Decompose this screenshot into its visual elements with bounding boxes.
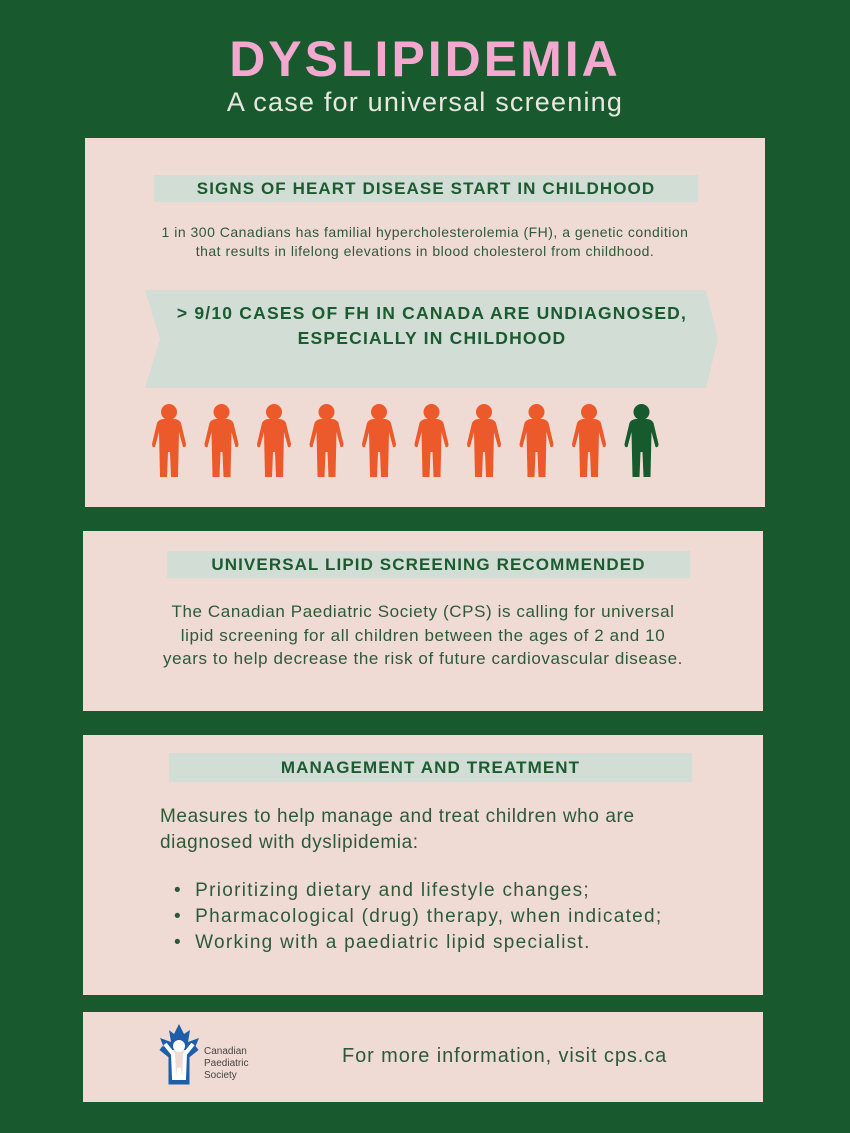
heading: management	[169, 753, 692, 782]
text: CPS recommendation	[163, 602, 683, 668]
text: FH stat: 1 in 300 Canadians has familial hypercholesterolemia (FH), a genetic condition	[162, 224, 688, 240]
heading: signs	[154, 175, 698, 202]
panel: footer	[83, 1012, 763, 1102]
panel: signs of heart disease	[85, 138, 765, 507]
text: more info: For more information, visit cps.ca	[342, 1045, 667, 1067]
heading: management: MANAGEMENT AND TREATMENT	[281, 758, 580, 777]
pictogram: 9 of 10 people	[152, 404, 658, 477]
title: DYSLIPIDEMIA	[229, 31, 621, 87]
text: CPS recommendation: years to help decrease the risk of future cardiovascular disease.	[163, 649, 683, 668]
list	[174, 880, 662, 953]
list: • Working with a paediatric lipid specialist.	[174, 932, 591, 953]
subtitle: A case for universal screening	[227, 87, 623, 117]
heading: screening: UNIVERSAL LIPID SCREENING RECOMMENDED	[211, 555, 646, 574]
logo: Society	[204, 1070, 237, 1081]
logo: Canadian	[204, 1046, 247, 1057]
text: intro	[160, 806, 635, 853]
text: intro: Measures to help manage and treat children who are	[160, 806, 635, 827]
text: intro: diagnosed with dyslipidemia:	[160, 832, 419, 853]
text: FH stat: that results in lifelong elevations in blood cholesterol from childhood.	[196, 243, 654, 259]
arrow banner: ESPECIALLY IN CHILDHOOD	[298, 328, 566, 348]
panel: management	[83, 735, 763, 995]
arrow banner: > 9/10 CASES OF FH IN CANADA ARE UNDIAGNOSED,	[177, 303, 687, 323]
heading: screening	[167, 551, 690, 578]
heading: signs: SIGNS OF HEART DISEASE START IN CHILDHOOD	[197, 179, 655, 198]
logo: Paediatric	[204, 1058, 248, 1069]
text: FH stat	[162, 224, 688, 259]
list: • Prioritizing dietary and lifestyle changes;	[174, 880, 590, 901]
arrow banner	[145, 290, 718, 388]
text: CPS recommendation: The Canadian Paediatric Society (CPS) is calling for universal	[171, 602, 675, 621]
panel: universal screening	[83, 531, 763, 711]
text: CPS recommendation: lipid screening for all children between the ages of 2 and 10	[181, 626, 665, 644]
list: • Pharmacological (drug) therapy, when indicated;	[174, 906, 662, 927]
logo	[160, 1024, 248, 1084]
